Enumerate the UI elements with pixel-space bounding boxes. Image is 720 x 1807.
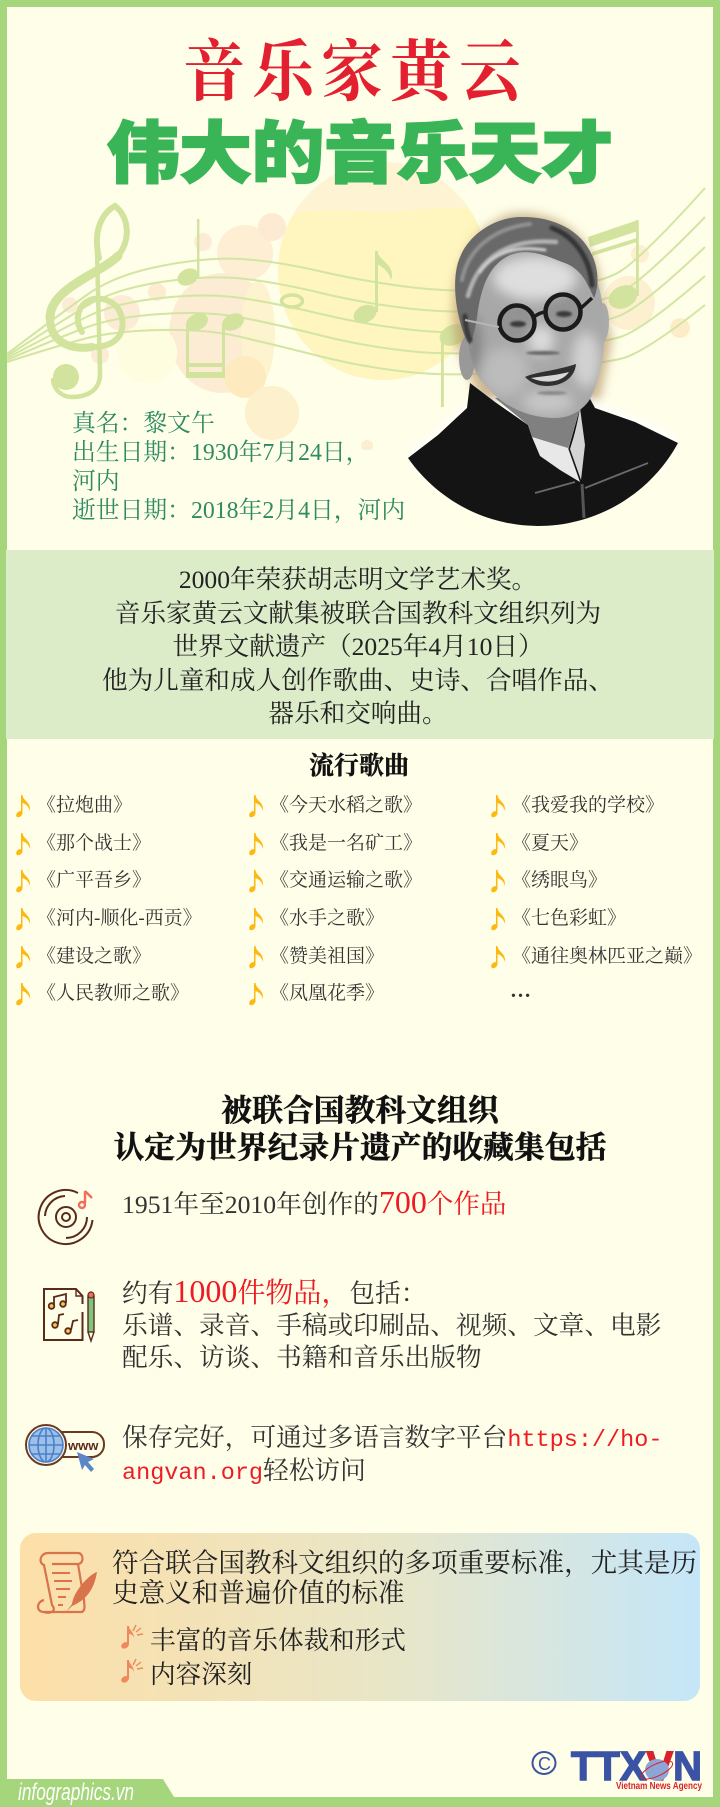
list: popular songs bbox=[16, 794, 702, 1006]
biography details bbox=[72, 410, 405, 524]
title: subtitle: 伟大的音乐天才 bbox=[107, 99, 614, 196]
biography details: 逝世日期：2018年2月4日，河内 bbox=[72, 498, 405, 524]
staff lines bbox=[7, 188, 705, 374]
song: 《那个战士》 bbox=[37, 833, 151, 854]
bullet: music genres: 丰富的音乐体裁和形式 bbox=[150, 1626, 406, 1655]
jacket details bbox=[535, 463, 648, 518]
panel: UNESCO criteria bbox=[20, 1533, 700, 1701]
song: 《夏天》 bbox=[512, 833, 588, 854]
treble clef bbox=[50, 206, 127, 397]
bullet: content depth: 内容深刻 bbox=[150, 1660, 252, 1689]
face bbox=[467, 243, 604, 418]
soft glow bbox=[408, 213, 678, 470]
text: UNESCO criteria: 符合联合国教科文组织的多项重要标准，尤其是历 bbox=[112, 1548, 697, 1578]
text: digital access: angvan.org轻松访问 bbox=[122, 1456, 366, 1487]
icon: sheet music document bbox=[43, 1288, 95, 1344]
panel: achievements: 音乐家黄云文献集被联合国教科文组织列为 bbox=[115, 599, 601, 628]
icon: scroll and quill bbox=[36, 1552, 97, 1614]
title: musician name: 音乐家黄云 bbox=[183, 18, 528, 114]
heading: UNESCO collection bbox=[114, 1094, 606, 1165]
icon: globe with www: www bbox=[67, 1438, 99, 1453]
glasses bbox=[465, 294, 592, 340]
hair strands bbox=[462, 224, 592, 340]
song: 《我是一名矿工》 bbox=[270, 833, 422, 854]
panel: achievements: 他为儿童和成人创作歌曲、史诗、合唱作品、 bbox=[102, 666, 614, 695]
jacket bbox=[408, 383, 678, 526]
neck bbox=[495, 392, 586, 449]
biography details: 出生日期：1930年7月24日， bbox=[72, 440, 369, 466]
text: UNESCO criteria bbox=[112, 1548, 697, 1608]
song: 《我爱我的学校》 bbox=[512, 795, 664, 816]
song: 《人民教师之歌》 bbox=[37, 983, 189, 1004]
song: 《七色彩虹》 bbox=[512, 908, 626, 929]
text: 1000 items bbox=[122, 1273, 661, 1372]
text: 700 works: 1951年至2010年创作的700个作品 bbox=[122, 1184, 506, 1220]
text: UNESCO criteria: 史意义和普遍价值的标准 bbox=[112, 1578, 405, 1608]
text: 1000 items: 乐谱、录音、手稿或印刷品、视频、文章、电影 bbox=[122, 1311, 661, 1340]
mouth bbox=[525, 364, 576, 386]
text: digital access: 保存完好，可通过多语言数字平台https://ho- bbox=[122, 1423, 662, 1454]
ears bbox=[459, 303, 609, 380]
text: digital access bbox=[122, 1423, 662, 1487]
portrait photo bbox=[408, 207, 678, 526]
panel: achievements: 2000年荣获胡志明文学艺术奖。 bbox=[179, 565, 537, 594]
song: 《建设之歌》 bbox=[37, 946, 151, 967]
heading: popular songs: 流行歌曲 bbox=[309, 753, 409, 780]
icon: globe with www bbox=[25, 1424, 105, 1472]
panel: achievements: 器乐和交响曲。 bbox=[268, 699, 448, 728]
text: 1000 items: 约有1000件物品，包括： bbox=[122, 1273, 426, 1309]
panel: achievements: 世界文献遗产（2025年4月10日） bbox=[172, 632, 544, 661]
background music illustration bbox=[6, 162, 706, 450]
facial shading bbox=[468, 256, 600, 414]
shirt collar bbox=[532, 408, 585, 482]
song: 《凤凰花季》 bbox=[270, 983, 384, 1004]
song: 《拉炮曲》 bbox=[37, 795, 132, 816]
panel: achievements bbox=[6, 550, 714, 739]
footer tab: infographics.vn: infographics.vn bbox=[18, 1779, 134, 1806]
heading: UNESCO collection: 认定为世界纪录片遗产的收藏集包括 bbox=[114, 1131, 606, 1165]
biography details: 河内 bbox=[72, 469, 120, 495]
song: 《今天水稻之歌》 bbox=[270, 795, 422, 816]
heading: UNESCO collection: 被联合国教科文组织 bbox=[221, 1094, 499, 1128]
song: 《通往奥林匹亚之巅》 bbox=[512, 946, 702, 967]
song: 《绣眼鸟》 bbox=[512, 870, 607, 891]
biography details: 真名：黎文午 bbox=[72, 411, 215, 437]
music notes bbox=[175, 219, 641, 407]
logo: TTXVN: C bbox=[538, 1754, 551, 1774]
song: 《赞美祖国》 bbox=[270, 946, 384, 967]
song: 《河内-顺化-西贡》 bbox=[37, 908, 202, 929]
ellipsis: … bbox=[510, 978, 531, 1002]
bokeh circles bbox=[62, 162, 690, 452]
song: 《交通运输之歌》 bbox=[270, 870, 422, 891]
song: 《水手之歌》 bbox=[270, 908, 384, 929]
icon: vinyl disc bbox=[38, 1188, 94, 1246]
eyes bbox=[510, 311, 572, 327]
hair bbox=[455, 217, 598, 345]
text: 1000 items: 配乐、访谈、书籍和音乐出版物 bbox=[122, 1343, 482, 1372]
song: 《广平吾乡》 bbox=[37, 870, 151, 891]
